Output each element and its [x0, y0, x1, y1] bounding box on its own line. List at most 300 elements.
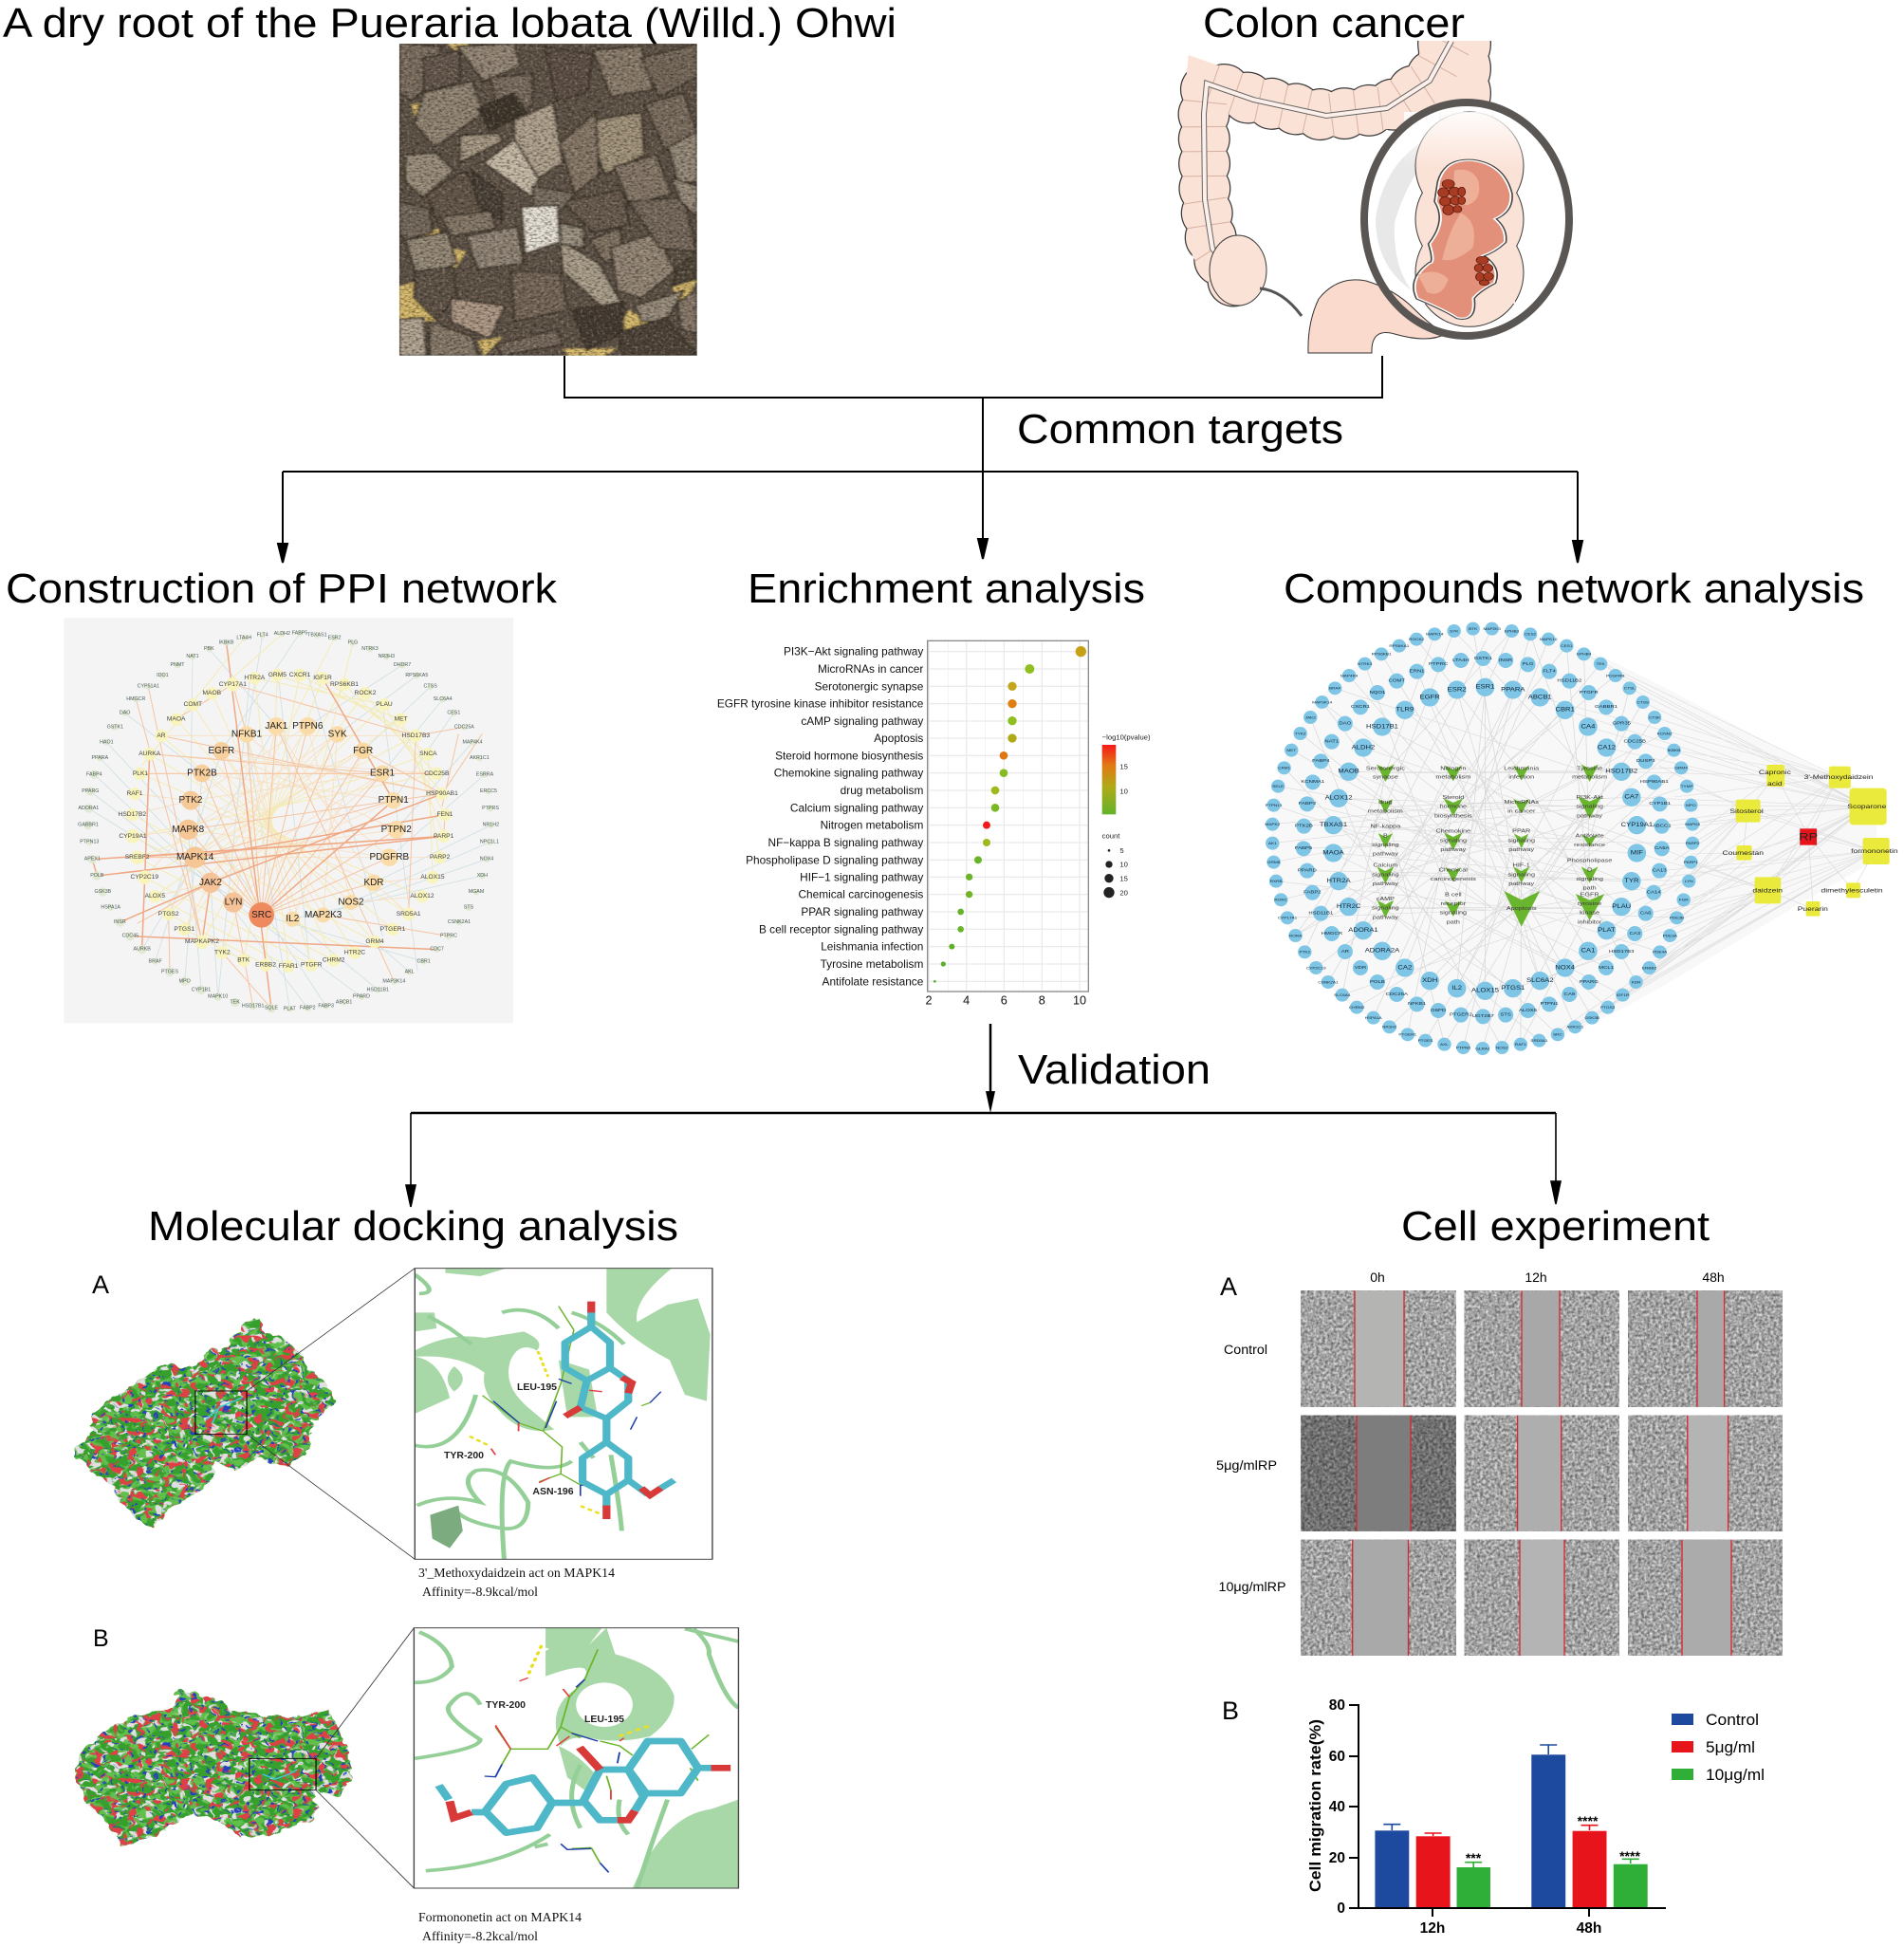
outer ring labels: SLC6A4 [434, 696, 453, 702]
residue sticks [482, 1307, 650, 1485]
target labels: outer ring: PDGFRB [1606, 674, 1625, 677]
target labels: second ring: UGT2B7 [1472, 1014, 1494, 1019]
label: common targets: Common targets [1017, 406, 1343, 453]
inner ring labels: MAPK8 [172, 825, 205, 835]
pathway nodes [1377, 765, 1604, 927]
pathway labels [717, 645, 924, 988]
target labels: second ring: GPR35 [1612, 721, 1631, 726]
outer ring labels: PTGES [161, 969, 178, 974]
target labels: third ring: HTR2A [1327, 879, 1351, 884]
outer ring labels: IKBKB [219, 640, 234, 645]
heading: compounds: Compounds network analysis [1284, 566, 1864, 612]
pathway labels: signaling [1507, 838, 1535, 844]
target labels: second ring: ALOX5 [1519, 1008, 1537, 1013]
tissue opening [1415, 160, 1510, 318]
pathway labels [1366, 766, 1613, 925]
caption A line 2: Affinity=-8.9kcal/mol [422, 1585, 538, 1599]
target labels: outer ring [1265, 626, 1701, 1050]
pathway labels: PI3K−Akt signaling pathway [784, 645, 923, 658]
target labels: second ring: NFKB1 [1408, 1002, 1426, 1007]
outer ring labels: AKL [405, 969, 415, 974]
inner ring labels: PTPN6 [292, 721, 323, 732]
target labels: outer ring: GLRA1 [1475, 1047, 1490, 1050]
residue nitrogen bonds [493, 1379, 661, 1496]
middle ring labels: CXCR1 [289, 672, 311, 678]
pathway labels: pathway [1508, 881, 1535, 887]
inner ring labels: PTPN1 [379, 795, 409, 806]
target labels: second ring: PPARD [1298, 868, 1317, 873]
pathway labels: pathway [1440, 847, 1467, 853]
pathway labels: pathway [1373, 851, 1399, 857]
inner ring labels: KDR [363, 878, 384, 888]
pathway labels: Steroid hormone biosynthesis [775, 749, 923, 762]
target labels: third ring: ALOX12 [1325, 795, 1353, 801]
middle ring labels: IGF1R [313, 675, 332, 681]
compound labels: formononetin [1851, 847, 1898, 855]
outer ring labels: MAPK10 [208, 994, 228, 1000]
compound labels: Capronic [1759, 769, 1791, 776]
target labels: second ring: CDC25B [1624, 739, 1646, 744]
outer ring labels: INSR [114, 919, 126, 925]
faint yellow edges [132, 634, 445, 966]
pathway labels: Calcium [1373, 862, 1397, 868]
legend: count: count [1102, 832, 1120, 841]
pathway labels: Chemokine [1436, 828, 1471, 834]
residue nitrogen bonds [485, 1679, 619, 1872]
pathway labels: drug metabolism [841, 784, 923, 797]
target labels: outer ring: IKBKB [1668, 748, 1681, 752]
pathway labels: Nitrogen [1440, 766, 1467, 771]
target labels: outer ring: TYMP [1681, 784, 1693, 788]
middle ring labels: BTK [237, 956, 250, 963]
pathway labels: Leishmania [1504, 766, 1540, 771]
compound labels: RP [1799, 830, 1818, 843]
target labels: second ring: POLB [1370, 979, 1385, 985]
arrow to PPI network [278, 472, 287, 563]
target labels: second ring: CXCR1 [1351, 705, 1370, 710]
target labels: outer ring: NOS2 [1496, 1046, 1508, 1049]
target labels: outer ring: CHRM2 [1349, 1005, 1365, 1010]
row label control: Control [1224, 1343, 1267, 1357]
panel: PPI network [64, 618, 513, 1023]
pathway labels: Serotonergic [1366, 766, 1406, 771]
inset frame [415, 1269, 712, 1559]
pathway labels: carcinogenesis [1431, 877, 1477, 882]
target labels: third ring: MIF [1631, 850, 1643, 856]
inset frame [414, 1628, 738, 1888]
compound labels: Puerarin [1798, 905, 1828, 913]
target labels: outer ring: KCNN2 [1657, 732, 1673, 735]
target labels: third ring: ABCB1 [1528, 695, 1552, 700]
hydrogen bonds [471, 1352, 603, 1515]
pathway labels: HIF−1 signaling pathway [800, 870, 923, 883]
residue label ASN-196: ASN-196 [532, 1486, 574, 1497]
target labels: third ring: ALDH2 [1352, 745, 1375, 751]
outer ring labels: ESRRA [476, 771, 494, 777]
outer ring labels: CDC45 [122, 934, 139, 939]
middle ring labels: SNCA [419, 751, 437, 757]
row label 10: 10μg/mlRP [1218, 1580, 1286, 1594]
target labels: second ring: PTGFR [1580, 690, 1599, 695]
target labels: third ring [1320, 684, 1653, 993]
target labels: outer ring: MAPK14 [1426, 632, 1444, 637]
target labels: outer ring: JAK2 [1305, 715, 1317, 719]
x axis ticks: 8 [1039, 993, 1045, 1007]
target labels: third ring: PLAT [1598, 928, 1617, 934]
outer ring labels: AURKB [133, 947, 151, 953]
network edge haze [1271, 629, 1876, 1048]
outer ring labels: FABP4 [86, 771, 102, 777]
outer ring labels: ALDH2 [274, 631, 290, 637]
target labels: outer ring: MAP2K3 [1483, 626, 1502, 631]
docking A inset [415, 1269, 712, 1559]
target labels: outer ring: RORC [1274, 898, 1287, 902]
significance stars [1466, 1813, 1640, 1865]
target labels: second ring: FABP2 [1303, 890, 1322, 895]
magnifier ring [1364, 102, 1569, 336]
pathway labels: EGFR [1581, 892, 1599, 898]
pathway labels: Chemical [1439, 867, 1468, 873]
pathway labels: B cell receptor signaling pathway [759, 922, 923, 936]
pathway labels: in cancer [1507, 808, 1536, 814]
middle ring labels: MAPKAPK2 [185, 938, 219, 945]
target labels: second ring: GSTK1 [1474, 656, 1492, 661]
middle ring labels: HTR2A [244, 675, 266, 681]
target labels: second ring: INSR [1499, 658, 1512, 663]
strong orange edges [92, 642, 445, 1009]
target labels: third ring: CA7 [1624, 794, 1638, 800]
pathway labels: signaling [1576, 804, 1603, 809]
middle ring labels: ALOX15 [420, 874, 445, 881]
target labels: outer ring: RXRB [1270, 879, 1283, 883]
middle ring labels: MET [395, 715, 408, 722]
cecum [1210, 235, 1266, 306]
target labels: second ring: CA3 [1629, 931, 1640, 936]
inner ring labels: PDGFRB [370, 852, 409, 862]
legend: 10μg/ml [1706, 1766, 1765, 1784]
target labels: third ring: ADORA2A [1365, 948, 1400, 954]
target labels: outer ring: TEK [1597, 661, 1605, 666]
pathway labels: kinase [1580, 910, 1599, 916]
outer ring labels: PPARG [82, 788, 99, 794]
outer ring labels: HAO1 [100, 739, 114, 745]
target labels: second ring: HMGCR [1322, 931, 1342, 936]
target labels: outer ring: PDE4A [1653, 950, 1667, 955]
outer ring labels: LTA4H [236, 635, 251, 640]
magnified tumour lumen [1415, 160, 1510, 318]
inner ring nodes [178, 717, 405, 928]
target labels: outer ring: PTGS2 [1600, 1005, 1616, 1010]
target labels: second ring: CA6 [1640, 911, 1652, 916]
inner ring labels: SRC [251, 910, 271, 920]
beta sheet [430, 1506, 463, 1548]
y axis ticks: 80 [1329, 1697, 1345, 1714]
inner ring labels: JAK2 [199, 878, 222, 888]
pathway labels: PPAR [1512, 828, 1531, 834]
pathway labels: Calcium signaling pathway [790, 801, 923, 814]
target labels: third ring: HSD17B1 [1366, 724, 1398, 730]
haustra fill [1204, 19, 1454, 281]
x axis labels: 12h [1420, 1920, 1445, 1937]
compound labels: Scoparone [1847, 803, 1886, 810]
target labels: outer ring: MPO [1686, 803, 1696, 807]
appendix [1260, 288, 1302, 316]
pathway labels: infection [1508, 774, 1535, 780]
outer ring labels: PTPN13 [80, 840, 99, 845]
target labels: third ring: PPARA [1501, 687, 1525, 693]
target labels: outer ring: PTK2 [1299, 950, 1311, 955]
inner ring labels: PTPN2 [381, 825, 412, 835]
target labels: second ring: DUSP3 [1636, 759, 1655, 764]
target labels: second ring: LTA4H [1452, 658, 1470, 663]
legend: count [1102, 832, 1128, 898]
legend: count: 5 [1119, 846, 1124, 855]
pathway labels: biosynthesis [1434, 813, 1473, 819]
legend: Control [1706, 1711, 1759, 1729]
legend: count: 20 [1119, 888, 1128, 897]
outer ring labels: NPC1L1 [480, 840, 499, 845]
pathway labels: Chemical carcinogenesis [798, 888, 923, 901]
arrow to docking [406, 1113, 416, 1207]
caption B line 2: Affinity=-8.2kcal/mol [422, 1929, 538, 1943]
inner ring labels [172, 721, 412, 924]
pathway labels: Tyrosine [1577, 766, 1603, 771]
target labels: outer ring: IGF1R [1617, 992, 1629, 997]
tumour lower [1474, 256, 1493, 286]
compound labels: acid [1767, 780, 1783, 788]
pathway labels: metabolism [1368, 808, 1403, 814]
pathway labels: pathway [1373, 881, 1399, 887]
target labels: outer ring: FGR [1679, 898, 1689, 902]
red scratch lines [1353, 1290, 1731, 1656]
inner ring labels: PTK2B [187, 768, 217, 778]
cell texture [1301, 1290, 1783, 1656]
residue label TYR-200: TYR-200 [444, 1450, 484, 1461]
pathway labels: PPAR signaling pathway [801, 905, 923, 918]
outer ring labels: PTPRC [440, 934, 457, 939]
outer ring labels: APEX1 [84, 857, 101, 862]
cartoon ribbon fills [545, 1628, 738, 1888]
target labels: third ring: PLAU [1612, 904, 1631, 910]
outer ring labels: FLT4 [257, 632, 268, 638]
target labels: second ring: PTPN1 [1541, 1002, 1559, 1007]
target labels: outer ring: CTSL [1624, 686, 1636, 691]
middle ring labels: HSD17B3 [402, 732, 430, 739]
inner ring labels: NFKB1 [231, 729, 263, 739]
target labels: third ring: TBXAS1 [1320, 823, 1347, 828]
outer ring labels: MGAM [469, 889, 484, 895]
compound labels [1723, 769, 1898, 913]
middle ring labels: CDC25B [424, 770, 450, 777]
inner ring labels: ESR1 [370, 768, 395, 778]
illustration: colon with tumour [1204, 19, 1569, 353]
pathway labels: Tyrosine metabolism [821, 957, 923, 971]
middle ring labels: PTGER1 [380, 926, 406, 933]
middle ring labels: RAF1 [126, 790, 143, 797]
outer ring labels: NTRK3 [361, 646, 379, 652]
bars [1375, 1754, 1648, 1908]
zoom box and ligand [195, 1269, 415, 1559]
target labels: third ring: ALOX15 [1471, 988, 1499, 993]
ring hole [576, 1682, 633, 1727]
x axis ticks: 2 [925, 993, 933, 1007]
target labels: third ring: CYP19A1 [1621, 823, 1653, 828]
middle ring labels: ERBB2 [255, 961, 276, 968]
outer ring labels: PNMT [170, 662, 185, 668]
x axis labels: 48h [1577, 1920, 1601, 1937]
error bars [1383, 1745, 1639, 1867]
middle ring labels: PTGFR [301, 961, 323, 968]
target labels: second ring: AR [1341, 949, 1349, 955]
target labels: outer ring: AKR1C1 [1566, 1025, 1584, 1029]
target labels: outer ring: NR1H2 [1382, 1025, 1397, 1029]
middle ring labels: PARP1 [434, 833, 454, 840]
pathway labels: pathway [1508, 847, 1535, 853]
target labels: third ring: TYR [1624, 879, 1639, 884]
heading: molecular docking: Molecular docking analysis [148, 1203, 678, 1250]
row label 5: 5μg/mlRP [1216, 1458, 1277, 1473]
target labels: outer ring: PTGER1 [1398, 1032, 1417, 1037]
middle ring labels: AURKA [139, 751, 161, 757]
target labels: second ring: CA13 [1653, 868, 1667, 873]
target labels: third ring: MAOA [1322, 850, 1344, 856]
cartoon ribbon strokes [415, 1274, 624, 1559]
outer ring labels: ERCC5 [480, 788, 497, 794]
pathway labels: PI3K-Akt [1576, 795, 1603, 801]
pathway labels: HIF-1 [1513, 862, 1530, 868]
column header 48h: 48h [1702, 1270, 1725, 1285]
outer ring labels: MPO [179, 978, 191, 984]
target labels: third ring: ESR2 [1448, 687, 1467, 693]
outer ring labels: NOX4 [480, 857, 493, 862]
pathway labels: Antifolate resistance [823, 974, 924, 988]
target labels: second ring: COMT [1389, 678, 1406, 683]
ligand sticks [565, 1311, 675, 1507]
connector: sources to common targets [283, 356, 1578, 472]
edges inside network [1272, 629, 1692, 1048]
inner ring labels: MAP2K3 [305, 910, 342, 920]
y axis title: Cell migration rate(%) [1307, 1719, 1324, 1892]
y axis ticks: 40 [1329, 1799, 1345, 1815]
outer ring labels: HSD11B1 [367, 987, 389, 992]
pathway labels: path [1447, 919, 1460, 925]
pathway labels: Phospholipase [1567, 858, 1613, 863]
target labels: outer ring: PDE3B [1670, 916, 1684, 920]
target labels: second ring: CA14 [1647, 890, 1661, 895]
target labels: outer ring: EPHB3 [1505, 629, 1520, 633]
target labels: outer ring: PDE3A [1663, 934, 1677, 937]
target labels: second ring: VDR [1355, 965, 1366, 971]
target labels: outer ring: SLC6A4 [1334, 992, 1351, 997]
target labels: second ring: PLG [1523, 662, 1533, 667]
target labels: second ring: STS [1500, 1012, 1511, 1017]
outer ring labels: ESR2 [328, 635, 342, 640]
inner ring labels: IL2 [286, 914, 300, 924]
outer ring labels: PLAT [284, 1006, 297, 1011]
target labels: second ring: ERN1 [1410, 669, 1424, 674]
pathway labels: metabolism [1572, 774, 1607, 780]
photo: dried root pieces [399, 44, 697, 356]
inner ring labels: EGFR [208, 746, 234, 756]
outer ring labels [78, 630, 499, 1011]
arrow to compounds [1573, 472, 1582, 563]
target labels: third ring: CA2 [1397, 965, 1412, 971]
pathway labels: signaling [1507, 872, 1535, 878]
target labels: third ring: HSD17B2 [1605, 769, 1637, 774]
outer ring labels: NR3H3 [379, 654, 395, 659]
target labels: outer ring: KDR [1632, 980, 1640, 984]
target labels: second ring: DAO [1339, 721, 1351, 726]
pathway labels: receptor [1441, 901, 1467, 907]
pathway labels: signaling [1372, 843, 1399, 848]
ligand oxygens [565, 1302, 661, 1519]
target labels: outer ring: CYP2C19 [1306, 966, 1326, 970]
target labels: outer ring: MAP4K4 [1340, 674, 1359, 677]
target labels: outer ring: CTSK [1649, 715, 1661, 719]
pathway labels: Serotonergic synapse [815, 679, 924, 693]
target labels: second ring: CA5A [1654, 846, 1670, 851]
significance stars: **** [1578, 1813, 1599, 1828]
outer ring labels: NR1H2 [483, 823, 499, 828]
y axis ticks: 20 [1329, 1850, 1345, 1866]
outer ring labels: CSNK2A1 [448, 919, 471, 925]
target labels: third ring: CA4 [1581, 724, 1596, 730]
cartoon ribbon fills [415, 1269, 711, 1431]
compound labels: daidzein [1752, 886, 1783, 894]
outer ring labels: XDH [477, 873, 488, 879]
pathway labels: NF-kappa [1371, 824, 1401, 829]
outer ring labels: TEK [230, 999, 240, 1005]
target labels: second ring: PTGER2 [1450, 1012, 1472, 1017]
outer ring labels: FABP3 [318, 1003, 334, 1009]
residue sticks [495, 1649, 709, 1863]
outer ring labels: SQLE [265, 1006, 279, 1011]
outer ring labels: BRAF [149, 958, 163, 964]
column header 12h: 12h [1525, 1270, 1547, 1285]
outer ring labels: FABP2 [300, 1006, 316, 1011]
target labels: outer ring: SELE [1272, 784, 1284, 788]
highlight [1418, 170, 1479, 294]
target labels: third ring: MAOB [1338, 769, 1359, 774]
ring background [1364, 102, 1569, 336]
target labels: outer ring: PTGES [1418, 1038, 1433, 1043]
middle ring labels: COMT [184, 701, 202, 708]
target labels: outer ring: CES2 [1525, 632, 1537, 637]
target labels: outer ring: HSPA1A [1365, 1015, 1382, 1020]
inner ring labels: JAK1 [265, 721, 288, 732]
light orange edges [132, 726, 442, 929]
middle ring labels: RPS6KB1 [330, 681, 359, 688]
middle ring labels: PLK1 [133, 770, 148, 777]
outer ring labels: GSTK1 [107, 724, 123, 730]
target labels: second ring: MCL1 [1599, 965, 1614, 971]
outer ring labels: RPS6KA5 [405, 673, 428, 678]
significance stars: **** [1619, 1848, 1640, 1864]
target labels: second ring [1295, 656, 1672, 1019]
outer ring labels: DHDR7 [394, 662, 411, 668]
compound labels: 3'-Methoxydaidzein [1804, 773, 1873, 781]
target labels: second ring: CDC25A [1386, 992, 1408, 997]
outer ring labels: CTSS [424, 684, 437, 690]
outer ring labels: HMGCR [126, 696, 146, 702]
target labels: second ring: FABP5 [1295, 846, 1312, 851]
outer ring labels: POLB [90, 873, 104, 879]
outer ring labels: MAP4K4 [462, 739, 483, 745]
glare [1376, 123, 1467, 290]
target labels: outer ring: MAPK10 [1540, 637, 1558, 641]
middle ring labels: PLAU [376, 701, 393, 708]
target labels: third ring: CA1 [1581, 948, 1596, 954]
